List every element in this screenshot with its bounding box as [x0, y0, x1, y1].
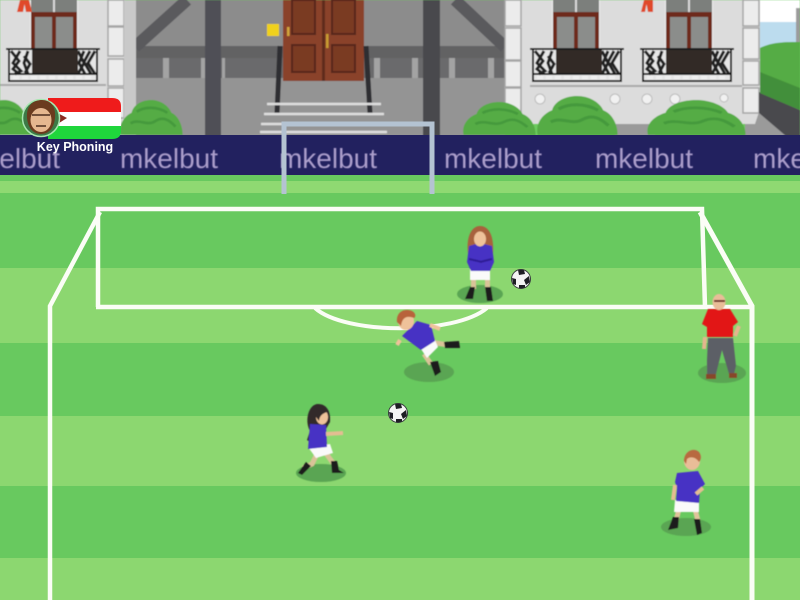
pitch with mown stripes [0, 175, 800, 600]
flag [48, 98, 121, 139]
pitch markings [50, 209, 752, 600]
sponsor text [0, 143, 800, 174]
player: diving boy [397, 310, 460, 382]
player: girl running [296, 404, 346, 482]
advertising board [0, 135, 800, 175]
player: standing girl with arms crossed [457, 226, 503, 303]
name label: Key Phoning [37, 140, 113, 154]
central grey hall [135, 0, 505, 136]
red curtains [17, 0, 653, 12]
left window and balcony [6, 0, 100, 81]
right windows and balconies [530, 0, 734, 81]
sponsor text: mkelbut [120, 143, 218, 174]
sponsor text: elbut [0, 143, 60, 174]
right wing wall [505, 0, 760, 124]
sponsor text: mkelbut [444, 143, 542, 174]
sky [760, 0, 800, 136]
side hedge [760, 42, 800, 110]
entrance door [283, 0, 364, 81]
player: boy standing right [661, 450, 711, 536]
avatar [22, 100, 60, 136]
hedges [0, 96, 746, 135]
ball near the girl [512, 270, 530, 288]
stair rails [277, 46, 370, 113]
player badge [22, 98, 121, 154]
goal frame [284, 124, 432, 194]
background: building facade [0, 0, 800, 136]
referee in red shirt [698, 294, 746, 383]
steps [260, 104, 387, 132]
path beside the building [615, 112, 790, 136]
left wing wall [0, 0, 136, 136]
sponsor text: mkelbut [595, 143, 693, 174]
ball in flight [388, 404, 408, 422]
sponsor text: mkelbut [279, 143, 377, 174]
yellow sign [267, 24, 279, 36]
wall studs [535, 94, 728, 104]
stone quoins [108, 0, 759, 118]
